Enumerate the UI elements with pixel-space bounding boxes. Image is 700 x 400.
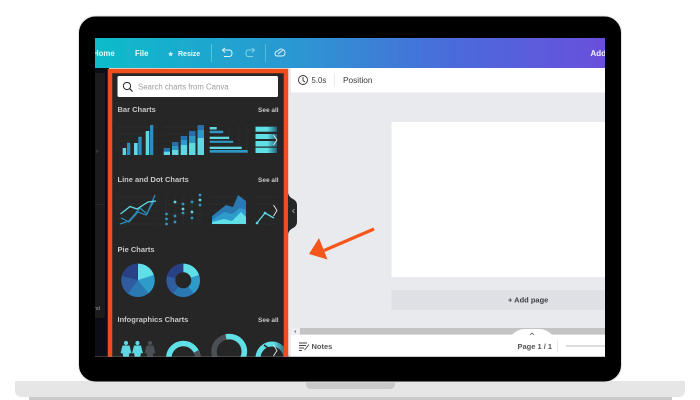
panel: charts list bbox=[110, 70, 286, 372]
laptop lid bbox=[78, 16, 622, 382]
chart: area bbox=[212, 195, 246, 224]
icon: undo bbox=[222, 48, 232, 56]
add page button: + Add page bbox=[508, 296, 548, 304]
section: infographics charts: Infographics Charts bbox=[118, 315, 188, 324]
chart: ring one bbox=[166, 340, 200, 357]
section: infographics charts: See all bbox=[258, 317, 279, 324]
add page button bbox=[392, 290, 606, 310]
editor toolbar: 5.0s bbox=[312, 76, 326, 85]
icon: cloud saved bbox=[275, 49, 285, 56]
chart: single line bbox=[256, 204, 278, 224]
chart: dot plot bbox=[165, 194, 205, 225]
top toolbar: Add bbox=[590, 49, 606, 58]
screen bbox=[93, 38, 606, 372]
chart: horizontal bars bbox=[210, 127, 248, 153]
icon: next chevron bbox=[274, 205, 277, 216]
chart: horizontal stacked bars bbox=[256, 127, 277, 153]
scrollbar bbox=[291, 328, 605, 335]
top toolbar bbox=[93, 38, 606, 68]
chart: multi-line bbox=[117, 195, 158, 224]
search box bbox=[118, 76, 278, 97]
bottom status bar: Page 1 / 1 bbox=[518, 342, 552, 351]
editor toolbar bbox=[291, 68, 605, 92]
chart: grouped bars bbox=[122, 125, 154, 155]
icon: clock bbox=[298, 76, 308, 84]
laptop base bbox=[15, 381, 685, 400]
chart: donut bbox=[166, 264, 200, 297]
section: pie charts bbox=[118, 245, 200, 297]
top toolbar: ★ bbox=[168, 51, 174, 58]
top toolbar: Home bbox=[93, 49, 115, 58]
left sidebar strip bbox=[94, 68, 109, 357]
chart: ring two bbox=[214, 337, 244, 367]
panel collapse handle bbox=[288, 193, 297, 234]
left sidebar strip: nd bbox=[94, 306, 100, 312]
section: bar charts: See all bbox=[258, 107, 279, 114]
section: infographics charts bbox=[118, 316, 288, 357]
section: pie charts: Pie Charts bbox=[118, 245, 155, 254]
section: bar charts: Bar Charts bbox=[118, 105, 156, 114]
top toolbar: Resize bbox=[178, 51, 200, 58]
chart: gauge bbox=[256, 342, 288, 357]
section: bar charts bbox=[117, 105, 279, 155]
highlight frame bbox=[110, 71, 286, 357]
editor toolbar: Position bbox=[343, 75, 373, 85]
canvas page bbox=[392, 122, 606, 277]
section: line and dot charts: See all bbox=[258, 177, 279, 184]
chart: people icons bbox=[120, 341, 156, 358]
icon: redo bbox=[246, 48, 254, 56]
arrow pointing at panel bbox=[309, 229, 374, 260]
section: line and dot charts: Line and Dot Charts bbox=[118, 175, 189, 184]
icon: next chevron bbox=[274, 135, 277, 145]
icon: notes bbox=[299, 343, 309, 350]
icon: next chevron bbox=[274, 345, 277, 356]
section: line and dot charts bbox=[117, 175, 279, 225]
bottom status bar: Notes bbox=[312, 342, 332, 351]
top toolbar: File bbox=[135, 49, 149, 58]
search box: Search charts from Canva bbox=[138, 82, 229, 92]
chart: stacked bars bbox=[163, 125, 205, 155]
chart: pie bbox=[121, 264, 155, 297]
bottom status bar bbox=[291, 329, 605, 357]
left sidebar strip: › bbox=[96, 149, 98, 155]
